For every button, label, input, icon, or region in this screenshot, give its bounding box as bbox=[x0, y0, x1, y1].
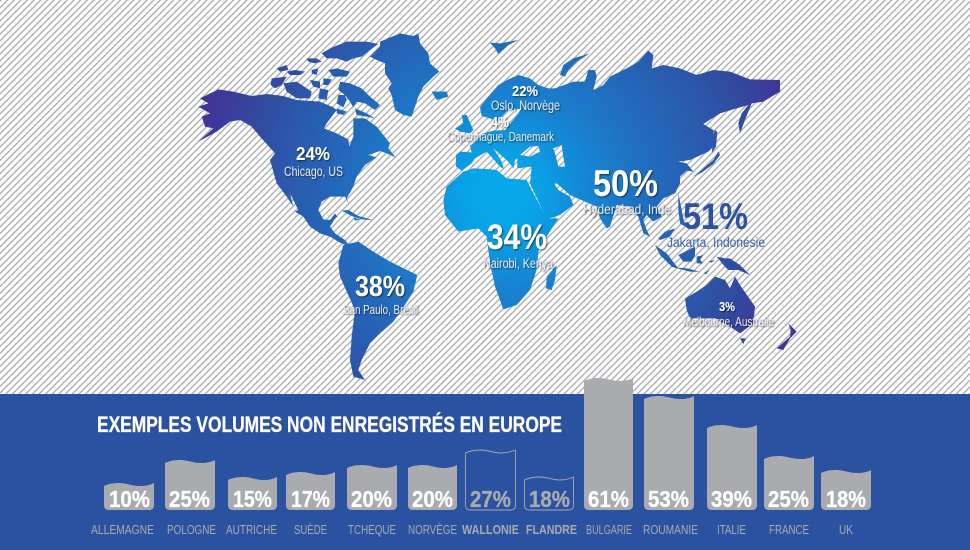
bar: Norvège: 20% bbox=[412, 486, 453, 512]
bar: Roumanie: ROUMANIE bbox=[643, 522, 698, 537]
callout: Oslo: 22% bbox=[512, 83, 538, 100]
callout: Melbourne bbox=[683, 300, 774, 329]
Japan bbox=[693, 130, 720, 177]
bar: Tcheque: TCHEQUE bbox=[348, 522, 396, 537]
Eurasia and Japan bbox=[455, 40, 780, 237]
callout: Hyderabad: 50% bbox=[593, 163, 658, 204]
bar: Wallonie bbox=[462, 450, 519, 537]
Cuba and Caribbean bbox=[342, 210, 373, 221]
bar: Allemagne: ALLEMAGNE bbox=[91, 522, 154, 537]
bar: Flandre bbox=[524, 477, 577, 537]
South America bbox=[338, 242, 417, 380]
bar: Autriche bbox=[226, 477, 277, 537]
Madagascar bbox=[546, 265, 557, 290]
Australia bbox=[685, 277, 755, 333]
bar: Italie: 39% bbox=[711, 486, 752, 512]
bar: Norvège: NORVÈGE bbox=[408, 522, 457, 537]
mainland North America bbox=[198, 89, 396, 247]
bar: UK bbox=[821, 470, 871, 537]
Eurasian mainland bbox=[456, 51, 780, 237]
bar: Pologne: 25% bbox=[169, 486, 210, 512]
bar: Pologne: POLOGNE bbox=[167, 522, 216, 537]
United Kingdom and Ireland bbox=[455, 115, 473, 133]
bar: Bulgarie bbox=[584, 378, 633, 537]
callout: San Paulo bbox=[343, 271, 418, 317]
callout: Hyderabad: Hyderabad, Inde bbox=[583, 201, 671, 217]
bar: Autriche: 15% bbox=[233, 486, 272, 512]
Canadian Arctic islands bbox=[271, 42, 380, 118]
callout: Oslo bbox=[491, 83, 560, 113]
New Guinea bbox=[717, 257, 750, 275]
bar: Bulgarie: BULGARIE bbox=[586, 522, 632, 537]
bar: Norvège bbox=[408, 465, 457, 537]
callout: Nairobi bbox=[483, 218, 553, 271]
bar: Roumanie bbox=[643, 396, 698, 537]
panel: Europe bbox=[0, 394, 970, 550]
bar: Bulgarie: 61% bbox=[588, 486, 629, 512]
callout: Jakarta: Jakarta, Indonésie bbox=[667, 234, 765, 250]
bar chart bbox=[91, 378, 871, 537]
callout: Copenhague: Copenhague, Danemark bbox=[447, 130, 555, 144]
bar: France: FRANCE bbox=[769, 522, 809, 537]
bar: Tcheque bbox=[347, 465, 397, 537]
bar: France: 25% bbox=[768, 486, 809, 512]
world map bbox=[198, 33, 797, 380]
bar: Flandre: FLANDRE bbox=[526, 522, 577, 537]
callout: Oslo: Oslo, Norvège bbox=[491, 98, 560, 113]
callout: Melbourne: 3% bbox=[719, 300, 735, 314]
striped background bbox=[0, 0, 970, 395]
callout: Jakarta: 51% bbox=[683, 196, 748, 237]
Indonesian and Philippine islands bbox=[655, 193, 715, 274]
callout: San Paulo: 38% bbox=[355, 271, 405, 303]
callout: Hyderabad bbox=[583, 163, 671, 217]
bar: Flandre: 18% bbox=[529, 486, 570, 512]
Africa bbox=[443, 168, 558, 309]
bar: Allemagne: 10% bbox=[109, 486, 150, 512]
bar: Italie bbox=[707, 425, 757, 537]
Arctic Russian islands bbox=[490, 40, 590, 77]
bar: UK: UK bbox=[839, 522, 853, 537]
callout: Chicago: Chicago, US bbox=[284, 164, 343, 179]
Iceland bbox=[432, 92, 448, 100]
callout: Copenhague: 4% bbox=[491, 114, 509, 131]
bar: France bbox=[764, 456, 814, 537]
bar: Suède: SUÈDE bbox=[294, 522, 327, 537]
callout: Jakarta bbox=[667, 196, 765, 250]
callout: Nairobi: Nairobi, Kenya bbox=[483, 256, 553, 271]
callout: Chicago: 24% bbox=[296, 144, 330, 164]
bar: Autriche: AUTRICHE bbox=[226, 522, 277, 537]
bar: Italie: ITALIE bbox=[717, 522, 746, 537]
Tasmania bbox=[740, 338, 746, 344]
bar: Pologne bbox=[165, 460, 216, 537]
bar: Wallonie: 27% bbox=[470, 486, 511, 512]
North America and Greenland bbox=[198, 33, 448, 247]
Greenland bbox=[370, 33, 439, 117]
bar: Suède bbox=[286, 472, 335, 537]
bar: Allemagne bbox=[91, 483, 154, 537]
callout: Melbourne: Melbourne, Australie bbox=[683, 315, 774, 329]
callout: San Paulo: San Paulo, Brésil bbox=[343, 302, 418, 317]
South America, Africa and Caribbean bbox=[338, 168, 558, 380]
callout: Nairobi: 34% bbox=[487, 218, 547, 257]
New Zealand bbox=[777, 323, 797, 350]
bar: Suède: 17% bbox=[291, 486, 330, 512]
callout: Chicago bbox=[284, 144, 343, 179]
bar: UK: 18% bbox=[826, 486, 866, 512]
bar: Roumanie: 53% bbox=[648, 486, 689, 512]
heading: EXEMPLES VOLUMES NON ENREGISTRÉS EN EUROPE bbox=[97, 412, 562, 437]
Southeast Asia and Oceania bbox=[655, 193, 797, 350]
bar: Tcheque: 20% bbox=[351, 486, 392, 512]
bar: Wallonie: WALLONIE bbox=[462, 522, 519, 537]
callout: Copenhague bbox=[447, 114, 555, 144]
